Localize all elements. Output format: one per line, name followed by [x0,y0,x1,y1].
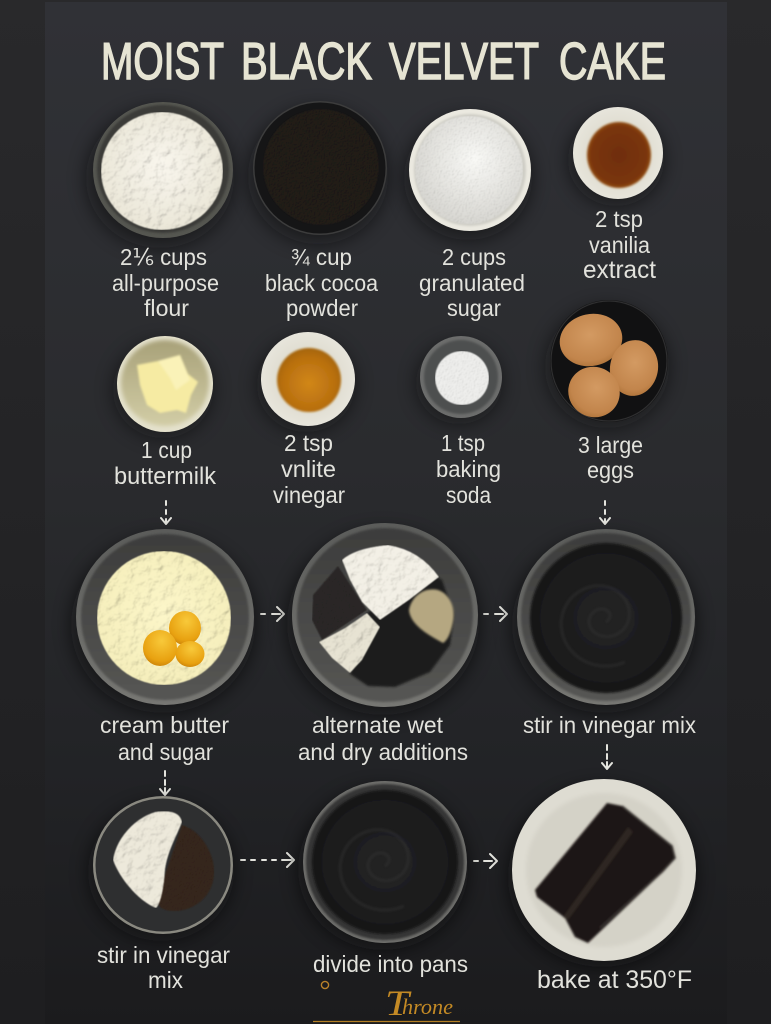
ingredient: sugar [404,109,532,321]
label: stir in vinegar: stir in vinegar mix [523,712,696,738]
label: vinegar: 2 tsp [284,430,333,456]
label: bake: bake at 350°F [537,966,692,994]
label: vanilla: 2 tsp [595,206,643,232]
title: MOIST [101,33,224,91]
ingredient: black cocoa [248,101,388,321]
label: vanilla: vanilia [589,232,650,258]
label: vinegar [273,430,345,508]
label: flour: flour [144,295,189,321]
arrow: pans right [474,854,497,868]
ingredient: eggs [545,300,669,483]
step: alternate wet and dry [287,523,479,765]
flour top [342,545,439,620]
label: flour: 2⅙ cups [120,244,207,270]
label: cream butter: cream butter [100,712,229,738]
label: vanilla [583,206,656,284]
cake slice [535,803,675,943]
label: eggs: eggs [587,457,634,483]
label: alternate [298,712,468,765]
watermark logo [313,981,460,1023]
sifted flour [113,811,182,908]
ingredient: baking soda [416,336,502,508]
label: vinegar: vinegar [273,482,345,508]
sifted cocoa [158,825,214,911]
arrow: alternate right [484,607,507,621]
label: stir in vinegar mix: stir in vinegar [97,942,230,968]
label: buttermilk: 1 cup [141,437,192,463]
label: cocoa [265,244,378,321]
label: baking soda: 1 tsp [441,430,485,456]
label: flour [112,244,219,321]
title [101,33,666,91]
label: eggs: 3 large [578,432,643,458]
step: divide into pans [298,781,468,977]
batter swirl [340,830,408,910]
label: sugar [419,244,525,321]
label: sugar: granulated [419,270,525,296]
label: eggs [578,432,643,483]
ingredient: vanilla extract [568,107,664,284]
label: alternate: alternate wet [312,712,444,738]
label: stir in vinegar mix [97,942,230,993]
step: cream butter and sugar [71,529,255,765]
label: cream butter [100,712,229,765]
ingredient: buttermilk [113,336,217,490]
label: cocoa: black cocoa [265,270,378,296]
label: alternate: and dry additions [298,739,468,765]
title: CAKE [559,33,666,91]
wet mix [409,589,454,643]
arrow: creamed right [261,607,284,621]
label: sugar: sugar [447,295,501,321]
label: stir in vinegar mix: mix [148,967,183,993]
egg yolks [143,611,204,667]
step: sift dry ingredients [88,796,234,993]
step: bake [508,779,696,994]
label: buttermilk: buttermilk [114,463,217,490]
label: cocoa: ¾ cup [291,244,352,270]
flour bottom [319,613,380,673]
title: BLACK [241,33,372,91]
arrow: cream down [160,771,170,795]
label: sugar: 2 cups [442,244,506,270]
label: cream butter: and sugar [118,739,213,765]
label: flour: all-purpose [112,270,219,296]
arrow: sift right [241,853,294,867]
dark cocoa quadrant [312,566,367,640]
butter pat [137,355,198,413]
arrows [160,501,612,868]
arrow: eggs down [600,501,610,524]
label: vinegar: vnlite [281,456,336,482]
batter swirl [561,586,629,666]
label: vanilla: extract [583,256,656,284]
step: stir in vinegar mix [512,529,696,738]
label: cocoa: powder [286,295,358,321]
watermark logo: hrone [402,994,453,1019]
arrow: buttermilk down [161,501,171,524]
title: VELVET [389,33,539,91]
arrow: stir down [602,745,612,769]
dark batter [350,570,454,687]
ingredient: vinegar [257,332,355,508]
watermark logo: T [385,983,413,1023]
label: buttermilk [114,437,217,490]
label: baking soda: baking [436,456,501,482]
label: divide: divide into pans [313,951,468,977]
label: baking soda [436,430,501,508]
ingredient: flour [86,102,234,321]
label: baking soda: soda [446,482,491,508]
